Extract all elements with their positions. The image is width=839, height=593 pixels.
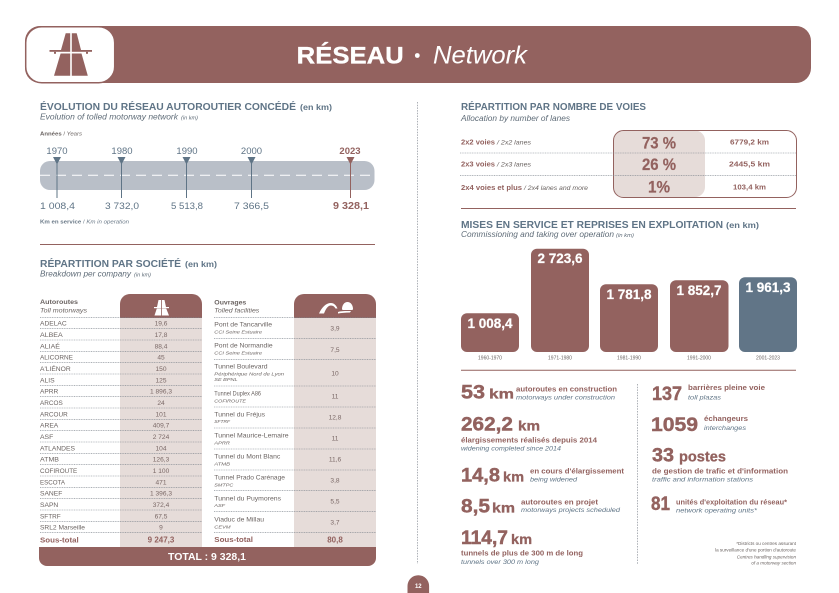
stat: 114,7 km: tunnels de plus de 300 m de long: [461, 550, 583, 557]
table: toll motorways: 1 896,3: [150, 389, 172, 396]
table: toll motorways: 150: [155, 366, 167, 373]
panel: network evolution: [40, 100, 374, 226]
table: toll motorways: 9: [159, 525, 163, 532]
table backgrounds: [120, 318, 376, 548]
table: toll motorways: ASF: [40, 434, 53, 441]
table: toll motorways: [40, 294, 202, 545]
stat: 33 postes: traffic and information stations: [652, 477, 753, 483]
marker 1970: 1 008,4: [40, 201, 75, 212]
stat: 33 postes: [652, 445, 788, 483]
heading: breakdown: Breakdown per company: [40, 270, 132, 278]
table: toll motorways: SANEF: [40, 491, 62, 498]
table: tolled facilities: 5,5: [330, 499, 340, 506]
bar 1991-2000: 1991-2000: [687, 355, 711, 361]
footnote: of a motorway section: [751, 560, 796, 565]
table: tolled facilities: SFTRF: [214, 419, 231, 425]
marker 1980: 1980: [111, 146, 133, 157]
row: 2x3: / 2x3 lanes: [496, 163, 531, 169]
bar chart: [461, 249, 797, 361]
heading: network evolution: [40, 100, 332, 122]
stat: 137: toll plazas: [688, 395, 721, 401]
table: tolled facilities: 12,8: [329, 414, 342, 421]
row: 2x4: [461, 179, 766, 197]
header banner: [25, 26, 811, 83]
heading: commissioning: (in km): [616, 233, 634, 239]
table: tolled facilities: Tunnel du Mont Blanc: [214, 454, 281, 461]
row: 2x3: 26 %: [642, 156, 676, 174]
marker 2000: 7 366,5: [234, 201, 269, 212]
stat: 1059: [651, 414, 748, 436]
table: toll motorways: 45: [157, 355, 165, 362]
panel: allocation by number of lanes: [460, 100, 796, 198]
table: toll motorways: A'LIÉNOR: [40, 364, 71, 373]
stat: 53 km: autoroutes en construction: [516, 387, 617, 394]
marker 1970: 1970: [46, 146, 68, 157]
stat: 33 postes: postes: [679, 449, 726, 466]
row: 2x3: 2445,5 km: [729, 162, 770, 169]
table: toll motorways: AREA: [40, 423, 59, 430]
row: 2x4: 1%: [648, 179, 670, 197]
table: toll motorways: 125: [155, 377, 167, 384]
heading: network evolution: (in km): [181, 116, 198, 122]
footnote: *Districts ou centres assurant: [736, 541, 797, 546]
table: tolled facilities: Pont de Normandie: [214, 343, 273, 350]
panel: key figures: [461, 382, 797, 566]
table: tolled facilities: Viaduc de Millau: [214, 517, 264, 524]
stat: 8,5 km: autoroutes en projet: [521, 499, 599, 506]
table: tolled facilities: 3,8: [330, 478, 340, 485]
table: tolled facilities: ATMB: [213, 462, 231, 468]
row: 2x2: / 2x2 lanes: [496, 141, 531, 147]
stat: 262,2 km: élargissements réalisés depuis 2014: [461, 438, 597, 445]
stat: 8,5 km: motorways projects scheduled: [521, 508, 621, 514]
stat: 14,8 km: [461, 465, 625, 487]
table: toll motorways: 104: [155, 445, 167, 452]
table: tolled facilities: Sous-total: [214, 535, 253, 544]
bar 1960-1970: 1960-1970: [478, 355, 502, 361]
table: toll motorways: ESCOTA: [40, 479, 66, 486]
stat: 14,8 km: being widened: [530, 478, 578, 484]
table: toll motorways: APRR: [40, 389, 59, 396]
column divider: [416, 102, 418, 564]
table: toll motorways: 24: [157, 400, 165, 407]
table: toll motorways: 126,3: [153, 457, 170, 464]
bar 1971-1980: 1971-1980: [548, 355, 572, 361]
table: tolled facilities: Tunnel Boulevard: [214, 364, 268, 371]
bar 1960-1970: 1 008,4: [467, 316, 513, 331]
stat: 114,7 km: tunnels over 300 m long: [461, 560, 540, 566]
table: tolled facilities: Pont de Tancarville: [214, 322, 272, 329]
page number: [408, 575, 429, 593]
table: tolled facilities: CCI Seine Estuaire: [214, 350, 262, 356]
table: toll motorways: ARCOS: [40, 400, 63, 407]
table: tolled facilities: Tunnel Duplex A86: [214, 391, 261, 398]
stat: 81: [651, 493, 787, 515]
row: 2x2: [461, 134, 769, 152]
heading: lanes: Allocation by number of lanes: [460, 114, 570, 123]
table: tolled facilities: 11: [332, 394, 339, 401]
table: tolled facilities: Tunnel Prado Carénage: [214, 474, 285, 481]
table: toll motorways: 1 100: [153, 468, 170, 475]
lanes table: [460, 130, 796, 198]
bar 1981-1990: [600, 284, 658, 361]
stat: 53 km: [461, 382, 617, 404]
table: toll motorways: Toll motorways: [40, 308, 88, 315]
table: tolled facilities: 7,5: [330, 347, 340, 354]
heading: breakdown: (en km): [185, 260, 217, 269]
title: RÉSEAU: [297, 41, 404, 69]
bar 1991-2000: [670, 280, 728, 361]
footnote: [715, 541, 797, 565]
table: tolled facilities: Tunnel du Puymorens: [214, 496, 282, 503]
table: toll motorways: SRL2 Marseille: [40, 525, 85, 532]
table: tolled facilities: 80,8: [327, 536, 343, 545]
panel: commissioning: [461, 220, 797, 361]
stat: 81: unités d'exploitation du réseau*: [676, 500, 787, 507]
km caption: Km en service / Km in operation: [40, 220, 129, 226]
footnote: Centres handling supervision: [737, 554, 796, 559]
marker 2023: 2023: [339, 146, 361, 157]
bar 1960-1970: [461, 313, 519, 361]
stat: 8,5 km: 8,5: [461, 495, 490, 517]
table: tolled facilities: [213, 294, 376, 545]
stat: 14,8 km: km: [503, 469, 524, 485]
header tab: motorway icon: [120, 294, 202, 318]
total bar: [39, 547, 376, 566]
table: toll motorways: 409,7: [153, 423, 170, 430]
table: toll motorways: 9 247,3: [148, 536, 175, 545]
stat: 33 postes: de gestion de trafic et d'information: [652, 468, 788, 475]
table: tolled facilities: Ouvrages: [214, 300, 247, 307]
table: toll motorways: ALICORNE: [40, 355, 74, 362]
table: tolled facilities: 10: [331, 371, 339, 378]
title: [297, 41, 529, 69]
row: 2x4: 103,4 km: [733, 184, 766, 192]
stat: 81: network operating units*: [676, 508, 758, 514]
table: toll motorways: ALIAÉ: [40, 341, 61, 350]
table: tolled facilities: Tolled facilities: [214, 307, 260, 314]
row: 2x3: [461, 156, 770, 174]
marker 1980: [105, 146, 139, 212]
table: tolled facilities: 3,7: [330, 519, 340, 526]
stat: 1059: interchanges: [704, 426, 746, 432]
row: 2x4: 2x4 voies et plus: [461, 185, 522, 192]
row: 2x4: / 2x4 lanes and more: [523, 186, 589, 192]
panel: breakdown per company: [39, 257, 376, 566]
stat: 114,7 km: km: [511, 531, 532, 547]
stat: 262,2 km: 262,2: [461, 414, 513, 436]
bar 1981-1990: 1 781,8: [606, 287, 652, 302]
row: 2x2: 2x2 voies: [461, 140, 495, 147]
bar 1981-1990: 1981-1990: [617, 355, 641, 361]
stat: 53 km: 53: [461, 382, 485, 404]
heading: breakdown: (in km): [134, 272, 151, 278]
bar 1971-1980: 2 723,6: [537, 251, 583, 266]
stat: 262,2 km: widening completed since 2014: [461, 446, 562, 452]
table: toll motorways: Autoroutes: [40, 299, 78, 306]
total bar: TOTAL : 9 328,1: [168, 552, 246, 563]
table: toll motorways: 372,4: [153, 502, 170, 509]
stat: 137: barrières pleine voie: [688, 385, 765, 392]
table: tolled facilities: 3,9: [330, 326, 340, 333]
heading: network evolution: (en km): [300, 103, 332, 112]
table: toll motorways: 2 724: [153, 434, 170, 441]
marker 2023: 9 328,1: [333, 201, 369, 212]
table: tolled facilities: COFIROUTE: [214, 399, 247, 405]
heading: lanes: RÉPARTITION PAR NOMBRE DE VOIES: [461, 100, 646, 113]
table: tolled facilities: Tunnel du Fréjus: [214, 412, 266, 419]
marker 1990: 1990: [176, 146, 198, 157]
stat: 8,5 km: [461, 495, 621, 517]
bar 2001-2023: 1 961,3: [745, 280, 791, 295]
table: toll motorways: ATLANDES: [40, 445, 76, 452]
marker 1980: 3 732,0: [105, 201, 139, 212]
footnote: la surveillance d'une portion d'autoroute: [715, 547, 796, 552]
table: tolled facilities: CCI Seine Estuaire: [214, 329, 262, 335]
stat: 137: 137: [652, 383, 682, 405]
marker 1970: [40, 146, 75, 212]
marker 1990: 5 513,8: [171, 201, 203, 212]
table: toll motorways: 19,6: [155, 321, 168, 328]
bar 1971-1980: [531, 249, 589, 361]
table: toll motorways: ALBEA: [40, 332, 63, 339]
stat: 114,7 km: [461, 527, 583, 566]
table: tolled facilities: Tunnel Maurice-Lemaire: [214, 433, 289, 440]
table: toll motorways: ADELAC: [40, 321, 67, 328]
heading: commissioning: Commissioning and taking over operation: [461, 230, 615, 239]
bar 2001-2023: [739, 277, 797, 361]
stat: 81: 81: [651, 493, 670, 515]
bar 1991-2000: 1 852,7: [676, 283, 722, 298]
table: tolled facilities: ASF: [213, 503, 226, 509]
marker 1990: [171, 146, 203, 212]
stat: 262,2 km: [461, 414, 597, 452]
heading: commissioning: (en km): [726, 221, 759, 230]
heading: commissioning: MISES EN SERVICE ET REPRISES EN EXPLOITATION: [461, 220, 723, 231]
table: tolled facilities: 11: [332, 435, 339, 442]
marker 2000: [234, 146, 269, 212]
bar 2001-2023: 2001-2023: [756, 355, 780, 361]
table: toll motorways: COFIROUTE: [40, 468, 78, 475]
stat: 137: [652, 383, 765, 405]
heading: breakdown: RÉPARTITION PAR SOCIÉTÉ: [40, 257, 181, 270]
stat: 8,5 km: km: [492, 499, 515, 515]
marker 2023: [333, 146, 369, 212]
table: toll motorways: 67,5: [155, 513, 168, 520]
heading: commissioning: [461, 220, 759, 239]
table: tolled facilities: CEVM: [214, 524, 231, 530]
row: 2x3: 2x3 voies: [461, 162, 495, 169]
table: toll motorways: 471: [155, 479, 167, 486]
stat: 114,7 km: 114,7: [461, 527, 508, 549]
table: toll motorways: Sous-total: [40, 536, 79, 545]
header tab: bridge and tunnel icon: [294, 294, 376, 318]
table: toll motorways: 101: [155, 411, 167, 418]
stat: 1059: 1059: [651, 414, 698, 436]
heading: breakdown: [40, 257, 217, 278]
stat: 33 postes: 33: [652, 445, 674, 467]
heading: lanes: [460, 100, 646, 123]
years caption: Années / Years: [40, 132, 82, 138]
table: toll motorways: 88,4: [155, 343, 168, 350]
stat: 14,8 km: en cours d'élargissement: [530, 468, 625, 475]
table: tolled facilities: APRR: [213, 440, 231, 446]
table: toll motorways: SFTRF: [40, 513, 61, 520]
road timeline: [40, 146, 374, 212]
table: tolled facilities: SE BPNL: [214, 377, 238, 383]
table: toll motorways: SAPN: [40, 502, 59, 509]
table: toll motorways: ALIS: [40, 377, 55, 384]
page number: 12: [415, 584, 422, 590]
table: toll motorways: 17,8: [155, 332, 168, 339]
table: tolled facilities: 11,6: [329, 457, 342, 464]
stat: 53 km: km: [489, 386, 514, 402]
table: tolled facilities: Périphérique Nord de Lyon: [214, 372, 284, 378]
row: 2x2: 6779,2 km: [730, 140, 769, 147]
marker 2000: 2000: [241, 146, 262, 157]
table: toll motorways: 1 396,3: [150, 491, 172, 498]
icon: motorway: [26, 27, 115, 83]
heading: network evolution: ÉVOLUTION DU RÉSEAU AUTOROUTIER CONCÉDÉ: [40, 100, 296, 113]
heading: network evolution: Evolution of tolled motorway network: [40, 112, 179, 122]
stat: 14,8 km: 14,8: [461, 465, 500, 487]
title: Network: [433, 41, 529, 69]
stat: 53 km: motorways under construction: [516, 395, 616, 401]
table: toll motorways: ARCOUR: [40, 411, 68, 418]
stat: 1059: échangeurs: [704, 416, 748, 423]
stat: 262,2 km: km: [518, 418, 540, 434]
row: 2x2: 73 %: [642, 134, 676, 152]
table: tolled facilities: SMTPC: [214, 482, 234, 488]
table: toll motorways: ATMB: [40, 457, 60, 464]
